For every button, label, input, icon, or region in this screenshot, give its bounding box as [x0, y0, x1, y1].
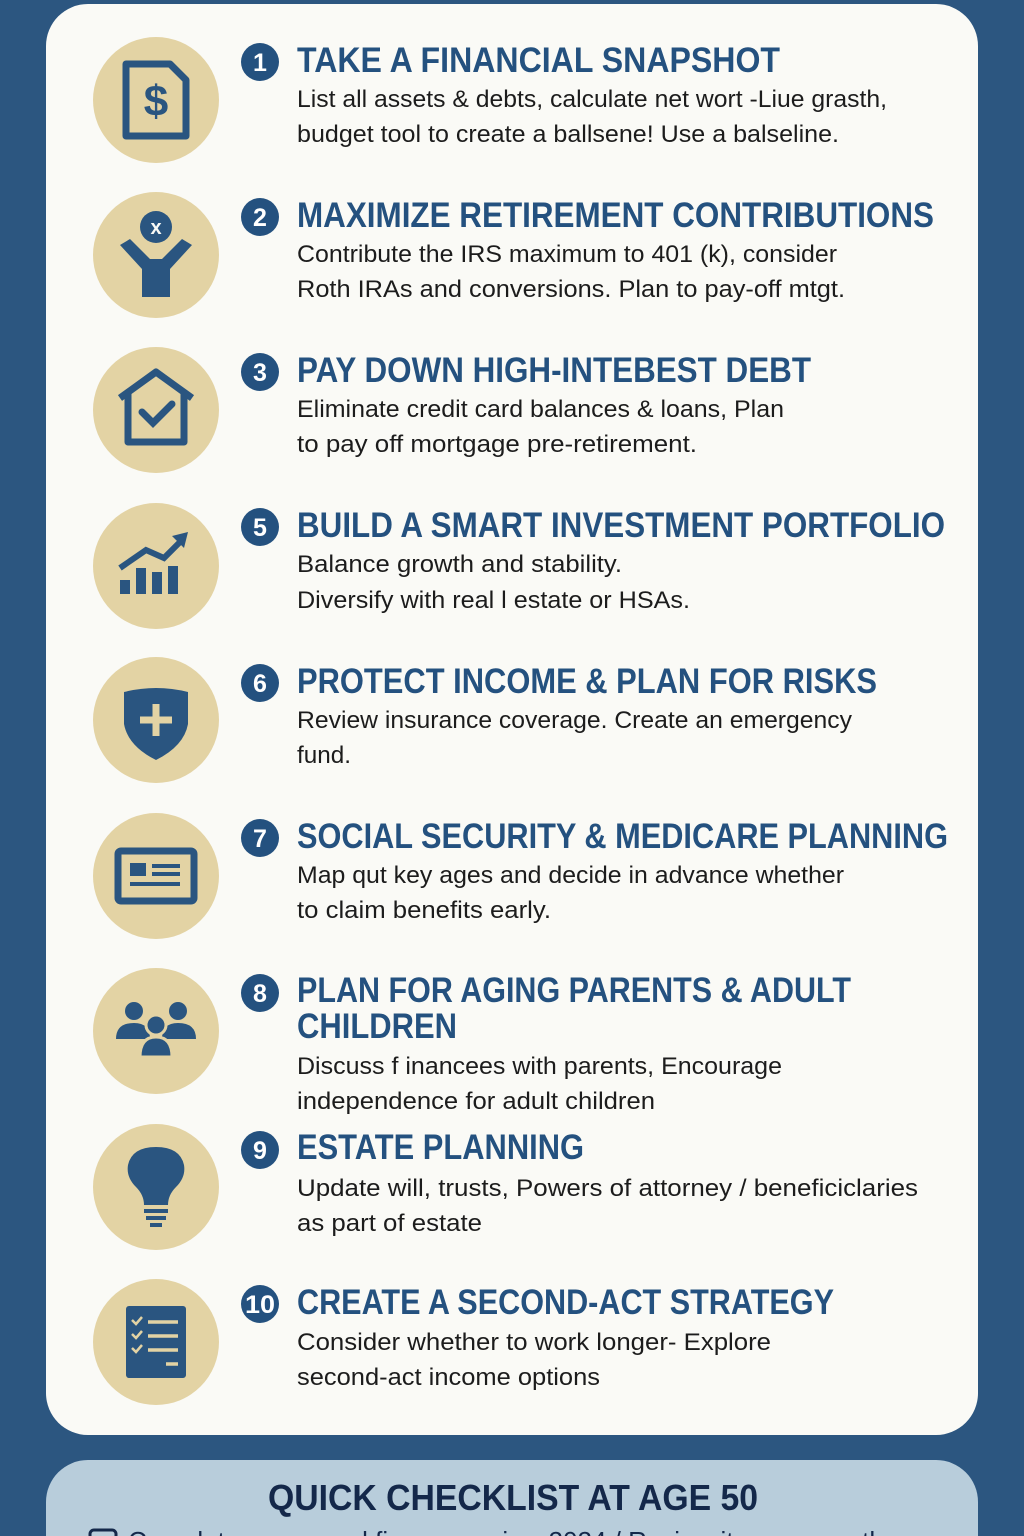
text 8 [297, 1053, 782, 1115]
title 3: PAY DOWN HIGH-INTEBEST DEBT [297, 351, 811, 390]
step 2 [93, 192, 934, 318]
text 3: Eliminate credit card balances & loans, Plan [297, 396, 784, 423]
title 6: PROTECT INCOME & PLAN FOR RISKS [297, 662, 877, 701]
step 7 [93, 813, 948, 939]
icon: document dollar [93, 37, 219, 163]
title 5: BUILD A SMART INVESTMENT PORTFOLIO [297, 506, 945, 545]
badge 7 [241, 819, 279, 857]
text 1: budget tool to create a ballsene! Use a balseline. [297, 121, 839, 148]
badge 6: 6 [253, 670, 267, 698]
text 3 [297, 396, 784, 458]
text 6: fund. [297, 742, 351, 769]
badge 3: 3 [253, 359, 267, 387]
text 6: Review insurance coverage. Create an emergency [297, 707, 852, 734]
badge 2 [241, 198, 279, 236]
title 8: CHILDREN [297, 1007, 457, 1046]
icon: shield plus [93, 657, 219, 783]
text 10 [297, 1329, 771, 1391]
panel: quick checklist [46, 1460, 978, 1536]
title 7: SOCIAL SECURITY & MEDICARE PLANNING [297, 817, 948, 856]
icon: person [93, 192, 219, 318]
text 5 [297, 551, 690, 614]
text 7: to claim benefits early. [297, 897, 551, 924]
icon: lightbulb [93, 1124, 219, 1250]
step 5 [93, 503, 945, 629]
title 1: TAKE A FINANCIAL SNAPSHOT [297, 41, 780, 80]
badge 10 [241, 1285, 279, 1323]
badge 8: 8 [253, 980, 267, 1008]
text 2: Roth IRAs and conversions. Plan to pay-off mtgt. [297, 276, 845, 303]
badge 9 [241, 1131, 279, 1169]
step 8 [93, 968, 851, 1115]
badge 1 [241, 43, 279, 81]
text 9: as part of estate [297, 1210, 482, 1237]
icon: checklist [93, 1279, 219, 1405]
text 2 [297, 241, 845, 303]
badge 7: 7 [253, 825, 267, 853]
text 9 [297, 1175, 918, 1237]
badge 5 [241, 508, 279, 546]
icon: ID card [93, 813, 219, 939]
text 8: independence for adult children [297, 1088, 655, 1115]
text 1 [297, 86, 887, 148]
text 8: Discuss f inancees with parents, Encourage [297, 1053, 782, 1080]
icon: family [93, 968, 219, 1094]
text 1: List all assets & debts, calculate net wort -Liue grasth, [297, 86, 887, 113]
badge 1: 1 [253, 49, 267, 77]
badge 3 [241, 353, 279, 391]
step 6 [93, 657, 877, 783]
text 10: Consider whether to work longer- Explore [297, 1329, 771, 1356]
badge 5: 5 [253, 514, 267, 542]
title 9: ESTATE PLANNING [297, 1128, 584, 1167]
title 10: CREATE A SECOND-ACT STRATEGY [297, 1283, 834, 1322]
step 1 [93, 37, 887, 163]
text 5: Diversify with real l estate or HSAs. [297, 587, 690, 614]
text 7: Map qut key ages and decide in advance whether [297, 862, 844, 889]
step 10 [93, 1279, 834, 1405]
icon: house check [93, 347, 219, 473]
checklist heading: QUICK CHECKLIST AT AGE 50 [268, 1477, 758, 1518]
text 3: to pay off mortgage pre-retirement. [297, 431, 697, 458]
icon: document dollar: $ [144, 77, 168, 126]
text 7 [297, 862, 844, 924]
step 9 [93, 1124, 918, 1250]
icon: growth chart [93, 503, 219, 629]
text 10: second-act income options [297, 1364, 600, 1391]
text 9: Update will, trusts, Powers of attorney / beneficiclaries [297, 1175, 918, 1202]
badge 6 [241, 664, 279, 702]
badge 9: 9 [253, 1137, 267, 1165]
icon: person: x [150, 217, 162, 239]
badge 10: 10 [245, 1291, 275, 1319]
text 2: Contribute the IRS maximum to 401 (k), consider [297, 241, 837, 268]
badge 8 [241, 974, 279, 1012]
title 8: PLAN FOR AGING PARENTS & ADULT [297, 971, 851, 1010]
text 6 [297, 707, 852, 769]
step 3 [93, 347, 811, 473]
title 2: MAXIMIZE RETIREMENT CONTRIBUTIONS [297, 196, 934, 235]
badge 2: 2 [253, 204, 267, 232]
text 5: Balance growth and stability. [297, 551, 622, 578]
title 8 [297, 971, 851, 1046]
